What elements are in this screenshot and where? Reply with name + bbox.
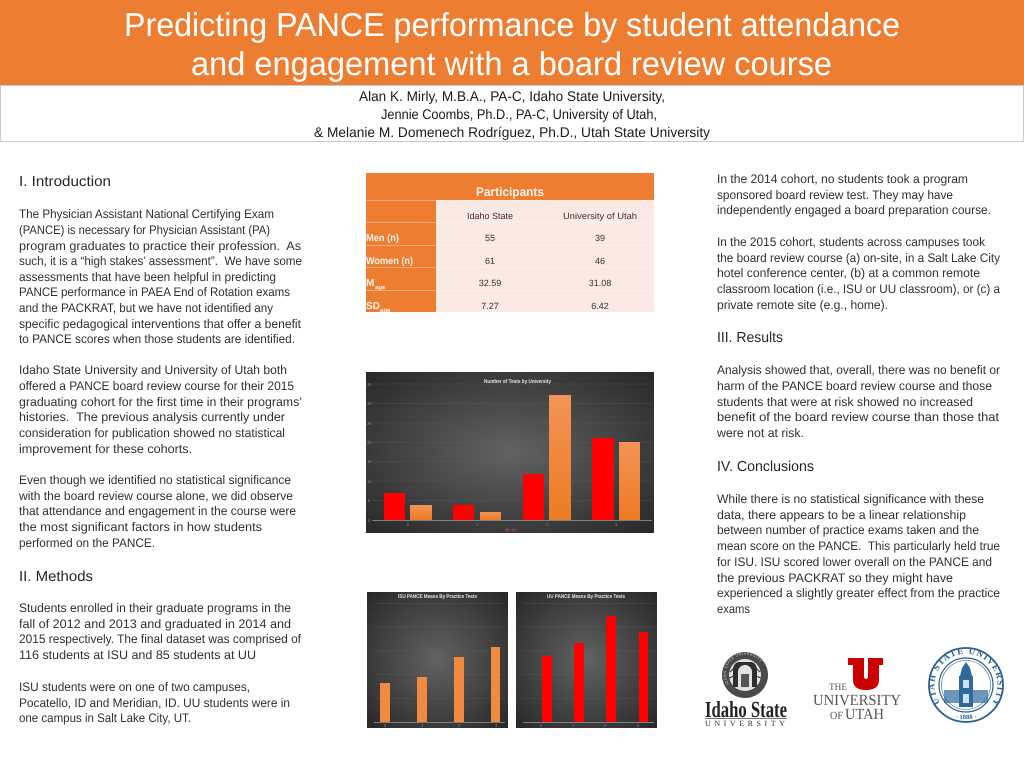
text block: conclusions: experienced a slightly greater effect from the practice [717,586,1000,600]
text block: introduction: The Physician Assistant National Certifying Exam [19,207,274,221]
bars [380,647,500,722]
table title: Participants [476,185,544,199]
x axis labels: 2 [546,522,549,527]
seal lettering: · 1888 · [956,714,976,721]
authors box: & Melanie M. Domenech Rodríguez, Ph.D., Utah State University [314,124,710,140]
text block: cohorts: the board review course (a) on-site, in a Salt Lake City [717,251,1001,265]
row: women: 46 [595,256,605,266]
text block: results [716,363,1000,440]
text block: results: Analysis showed that, overall, there was no benefit or [717,363,1000,377]
authors box: Jennie Coombs, Ph.D., PA-C, University of Utah, [381,106,657,122]
heading: conclusions: IV. Conclusions [717,459,814,475]
icon: block U [848,658,883,690]
text block: conclusions: between number of practice exams taken and the [717,523,979,537]
text block: conclusions: data, there appears to be a linear relationship [717,508,966,522]
text block: introduction: that attendance and engagement in the course were [19,504,296,518]
text block: conclusions: While there is no statistical significance with these [717,492,984,506]
x axis labels: 3 [637,723,640,728]
row: men: 55 [485,233,495,243]
row: mean age: 32.59 [479,278,501,288]
row: women: 61 [485,256,495,266]
row: women: Women (n) [366,256,413,267]
row: women [366,256,605,267]
y axis labels: 25 [367,421,372,426]
text block: methods: fall of 2012 and 2013 and graduated in 2014 and [19,617,291,631]
text block: cohorts: In the 2015 cohort, students across campuses took [717,235,986,249]
text block: introduction: assessments that have been helpful in predicting [19,270,276,284]
text block: introduction: improvement for these cohorts. [19,442,192,456]
y axis labels: 15 [367,459,372,464]
authors box [0,86,1024,142]
x axis labels: 3 [495,723,498,728]
text block: introduction: and the PACKRAT, but we have not identified any [19,301,274,315]
text block: introduction: performed on the PANCE. [19,536,155,550]
bar chart: UU PANCE means [516,592,657,728]
column headers: University of Utah [563,211,637,221]
wordmark: UNIVERSITY [813,692,901,709]
text block: cohorts [717,172,1001,312]
text block: introduction: graduating cohort for the first time in their programs’ [19,395,302,409]
text block: conclusions [717,492,1000,616]
text block: methods: Students enrolled in their graduate programs in the [19,601,291,615]
text block: introduction: Even though we identified no statistical significance [19,473,291,487]
wordmark [813,682,901,723]
text block: cohorts: sponsored board review test. They may have [717,188,953,202]
text block: conclusions: mean score on the PANCE. This particularly held true [717,539,1000,553]
y axis labels: 5 [368,498,371,503]
text block: introduction: offered a PANCE board review course for their 2015 [19,379,294,393]
wordmark: THE [829,682,847,693]
y axis labels: 0 [368,518,371,523]
text block: introduction: Idaho State University and University of Utah both [19,363,287,377]
authors box: Alan K. Mirly, M.B.A., PA-C, Idaho State University, [359,88,665,104]
wordmark [705,697,787,728]
wordmark: Idaho State [705,697,787,722]
x axis labels: 0 [407,522,410,527]
text block: introduction: such, it is a “high stakes’ assessment”. We have some [19,254,302,268]
text block: cohorts: In the 2014 cohort, no students took a program [717,172,968,186]
x axis labels: 0 [384,723,387,728]
row: mean age: M [366,278,374,289]
text block: cohorts: independently engaged a board preparation course. [717,203,991,217]
text block: introduction: the most significant factors in how students [19,520,262,534]
text block: introduction: specific pedagogical interventions that offer a benefit [19,317,302,331]
bars [542,616,648,722]
text block: results: harm of the PANCE board review course and those [717,379,992,393]
text block: cohorts: classroom location (i.e., ISU or UU classroom), or (c) a [717,282,1000,296]
bar chart: number of tests by university [366,372,654,533]
chart title: Number of Tests by University [484,379,552,385]
logo: Idaho State University [705,652,787,728]
text block: methods [19,601,302,725]
legend: ISU UU [505,528,517,532]
text block: methods: 116 students at ISU and 85 students at UU [19,648,256,662]
y axis labels [367,382,372,523]
text block: methods: 2015 respectively. The final dataset was comprised of [19,632,302,646]
row: sd age: SD [366,301,380,312]
x axis labels: 2 [604,723,607,728]
y axis labels: 30 [367,401,372,406]
x axis labels [384,723,498,728]
heading: results: III. Results [717,330,783,346]
text block: introduction: to PANCE scores when those students are identified. [19,332,295,346]
left text column [18,174,302,725]
text block: methods: one campus in Salt Lake City, UT. [19,711,191,725]
icon: ISU seal: IDAHO STATE UNIVERSITY [724,652,762,685]
wordmark: UNIVERSITY [705,719,785,728]
bars: orange series [410,395,640,520]
text block: cohorts: private remote site (e.g., home). [717,298,888,312]
x axis labels: 1 [572,723,575,728]
text block: introduction: program graduates to practice their profession. As [19,239,301,253]
icon: Old Main tower [944,662,988,707]
heading: methods: II. Methods [19,569,93,585]
chart title: ISU PANCE Means By Practice Tests [398,594,477,600]
row: sd age: 6.42 [591,301,609,311]
text block: results: students that were at risk showed no increased [717,395,973,409]
row: sd age: 7.27 [481,301,499,311]
title: Predicting PANCE performance by student attendance [124,6,900,43]
text block: introduction: consideration for publication showed no statistical [19,426,285,440]
bars: red series [384,438,614,520]
row: men [366,233,605,244]
text block: introduction: histories. The previous analysis currently under [19,410,285,424]
y axis labels: 35 [367,382,372,387]
text block: results: benefit of the board review course than those that [717,410,1000,424]
y axis labels: 20 [367,440,372,445]
right text column [716,172,1001,616]
text block: conclusions: the previous PACKRAT so they might have [717,571,953,585]
title banner [0,0,1024,85]
seal lettering: UTAH STATE UNIVERSITY [930,649,1002,705]
bar chart: ISU PANCE means [367,592,508,728]
text block: introduction: with the board review course alone, we did observe [18,489,293,503]
table: participants [366,173,654,314]
text block: cohorts: hotel conference center, (b) at a common remote [717,266,980,280]
x axis labels: 1 [421,723,424,728]
logo: Utah State University seal [928,647,1004,723]
wordmark: UTAH [845,706,884,723]
y axis labels: 10 [367,479,372,484]
text block: methods: ISU students were on one of two campuses, [19,680,250,694]
column headers: Idaho State [467,211,513,221]
wordmark: OF [830,710,843,722]
text block: results: were not at risk. [716,426,804,440]
x axis labels: 1 [476,522,479,527]
text block: introduction: PANCE performance in PAEA End of Rotation exams [19,285,290,299]
row: sd age [366,301,609,314]
title: and engagement with a board review course [191,45,832,82]
x axis labels [540,723,640,728]
row: men: 39 [595,233,605,243]
row: mean age [366,278,611,291]
row: men: Men (n) [366,233,399,244]
x axis labels: 0 [540,723,543,728]
row: mean age: age [375,285,386,291]
x axis labels: 2 [458,723,461,728]
title [124,6,900,82]
x axis labels: 3 [615,522,618,527]
logo: University of Utah [813,658,901,723]
text block: introduction [18,207,302,550]
row: sd age: age [380,308,391,314]
heading: introduction: I. Introduction [19,174,111,190]
text block: conclusions: exams [717,602,750,616]
x axis labels [407,522,618,527]
chart title: UU PANCE Means By Practice Tests [547,594,625,600]
text block: introduction: (PANCE) is necessary for Physician Assistant (PA) [19,223,270,237]
row: mean age: 31.08 [589,278,611,288]
text block: methods: Pocatello, ID and Meridian, ID. UU students were in [19,696,290,710]
text block: conclusions: for ISU. ISU scored lower overall on the PANCE and [717,555,992,569]
column headers [467,211,637,221]
